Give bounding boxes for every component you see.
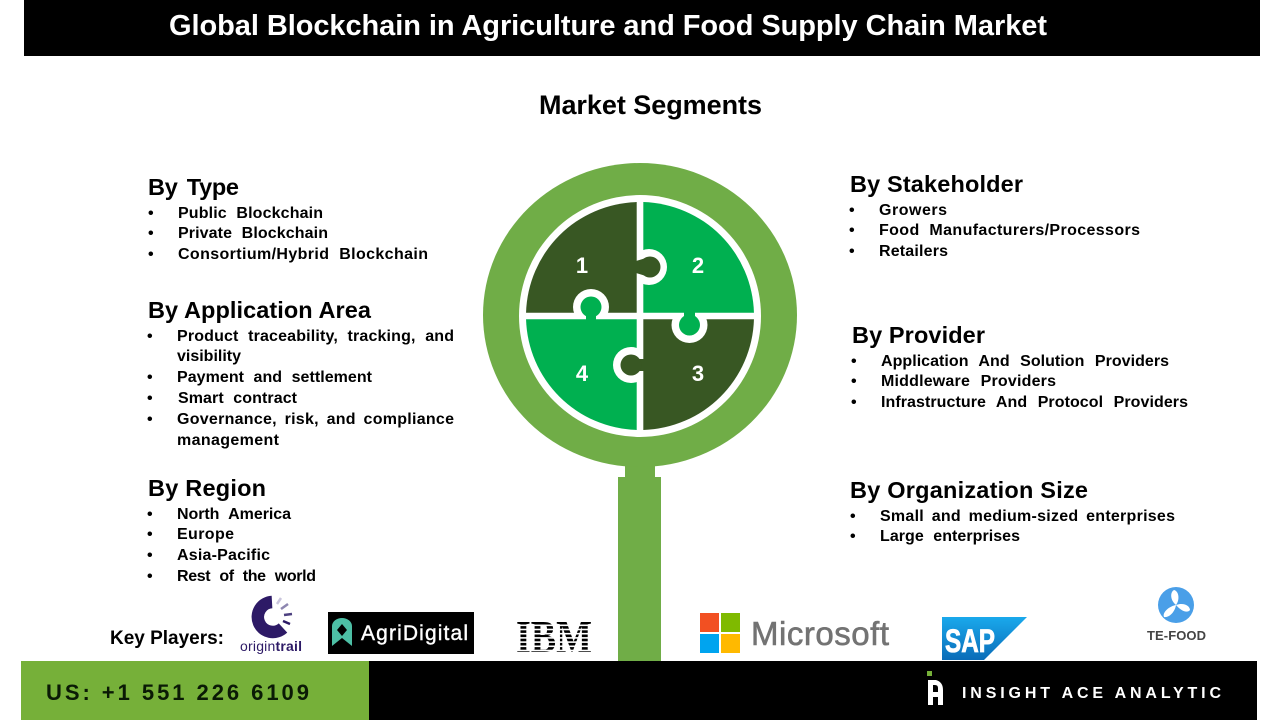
panel: by application area: By Application Area xyxy=(148,297,372,323)
panel: by region: • xyxy=(147,506,153,523)
puzzle piece 1: 1 xyxy=(576,253,588,278)
panel: by stakeholder: By Stakeholder xyxy=(850,171,1023,197)
panel: by region: Asia-Pacific xyxy=(177,547,270,564)
panel: by provider: Application And Solution Providers xyxy=(881,353,1169,370)
puzzle piece 3: 3 xyxy=(692,361,704,386)
panel: by region: Europe xyxy=(177,526,234,543)
logo: agridigital: AgriDigital xyxy=(361,622,468,645)
panel: by application area: • xyxy=(147,390,153,407)
puzzle piece 3 xyxy=(643,316,754,430)
panel: by provider: • xyxy=(851,373,857,390)
logo: microsoft xyxy=(700,613,889,653)
panel: by provider: • xyxy=(851,353,857,370)
panel: by provider: Infrastructure And Protocol Providers xyxy=(881,394,1188,411)
puzzle piece 1 xyxy=(526,202,637,325)
phone number: US: +1 551 226 6109 xyxy=(46,680,309,705)
logo: microsoft: Microsoft xyxy=(751,615,889,652)
panel: by organization size xyxy=(850,477,1175,545)
panel: by type: Private Blockchain xyxy=(178,225,328,242)
logo: sap: SAP xyxy=(945,623,995,659)
puzzle piece 4 xyxy=(526,296,649,430)
title banner: Global Blockchain in Agriculture and Food Supply Chain Market xyxy=(169,10,1047,42)
panel: by type: • xyxy=(148,205,154,222)
panel: by region: By Region xyxy=(148,475,266,501)
panel: by application area: Product traceability, tracking, and xyxy=(177,328,454,345)
panel: by region: • xyxy=(147,568,153,585)
panel: by organization size: • xyxy=(850,508,856,525)
panel: by stakeholder: Food Manufacturers/Processors xyxy=(879,222,1140,239)
panel: by application area: visibility xyxy=(177,348,241,365)
panel: by application area: • xyxy=(147,411,153,428)
magnifier ring xyxy=(483,163,797,467)
panel: by provider: By Provider xyxy=(852,322,985,348)
company name: INSIGHT ACE ANALYTIC xyxy=(962,685,1221,702)
panel: by application area: management xyxy=(177,432,280,449)
panel: by type: • xyxy=(148,225,154,242)
puzzle piece 2: 2 xyxy=(692,253,704,278)
panel: by provider: Middleware Providers xyxy=(881,373,1056,390)
panel: by application area: • xyxy=(147,369,153,386)
panel: by type: Public Blockchain xyxy=(178,205,323,222)
magnifier handle xyxy=(618,460,661,662)
heading: market segments: Market Segments xyxy=(539,90,762,120)
panel: by type: By Type xyxy=(148,174,239,200)
panel: by region: Rest of the world xyxy=(177,568,316,585)
phone panel xyxy=(21,661,369,720)
magnifier with puzzle xyxy=(483,163,797,662)
panel: by provider: • xyxy=(851,394,857,411)
panel: by stakeholder: Retailers xyxy=(879,243,948,260)
logo: sap xyxy=(942,617,1027,660)
panel: by application area xyxy=(147,297,454,449)
logo: agridigital xyxy=(328,612,474,654)
panel: by provider xyxy=(851,322,1188,411)
panel: by type: • xyxy=(148,246,154,263)
panel: by application area: • xyxy=(147,328,153,345)
logo: origintrail xyxy=(240,598,302,654)
panel: by region xyxy=(147,475,316,585)
logo: ibm: IBM xyxy=(516,611,592,662)
panel: by stakeholder: Growers xyxy=(879,202,947,219)
panel: by stakeholder xyxy=(849,171,1140,260)
panel: by application area: Smart contract xyxy=(178,390,298,407)
panel: by stakeholder: • xyxy=(849,243,855,260)
icon: insight ace logo xyxy=(927,671,943,705)
footer bar xyxy=(21,661,1257,720)
key players label: Key Players: xyxy=(110,628,224,649)
panel: by region: • xyxy=(147,547,153,564)
panel: by region: • xyxy=(147,526,153,543)
panel: by type xyxy=(148,174,428,263)
panel: by application area: Payment and settlement xyxy=(177,369,373,386)
panel: by organization size: By Organization Size xyxy=(850,477,1088,503)
title banner xyxy=(24,0,1260,56)
panel: by organization size: Small and medium-sized enterprises xyxy=(880,508,1175,525)
logo: origintrail: origintrail xyxy=(240,638,302,654)
panel: by region: North America xyxy=(177,506,291,523)
puzzle piece 2 xyxy=(636,202,754,313)
panel: by stakeholder: • xyxy=(849,202,855,219)
logo: te-food xyxy=(1147,587,1206,643)
panel: by stakeholder: • xyxy=(849,222,855,239)
logo: te-food: TE-FOOD xyxy=(1147,628,1206,643)
panel: by organization size: • xyxy=(850,528,856,545)
panel: by application area: Governance, risk, and compliance xyxy=(177,411,454,428)
puzzle piece 4: 4 xyxy=(576,361,589,386)
panel: by type: Consortium/Hybrid Blockchain xyxy=(178,246,428,263)
panel: by organization size: Large enterprises xyxy=(880,528,1020,545)
